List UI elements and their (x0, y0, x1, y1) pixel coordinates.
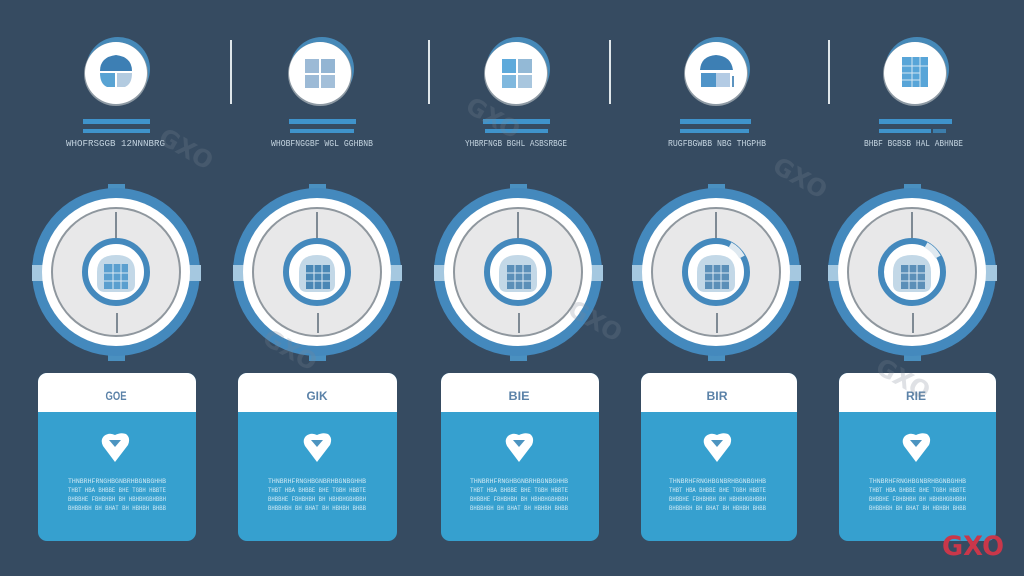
watermarks: GXO (154, 123, 218, 176)
card 4 (641, 373, 797, 541)
card heading 3: BIE (508, 389, 530, 403)
card text 2: BHBBHBH BH BHAT BH HBHBH BHBB (268, 505, 366, 512)
icon: dial window 1 (97, 255, 135, 292)
card text 5: BHBBHE FBHBHBH BH HBHBHGBHBBH (869, 496, 966, 503)
card text 1: BHBBHE FBHBHBH BH HBHBHGBHBBH (68, 496, 166, 503)
card text 1: THNBRHFRNGHBGNBRHBGNBGHHB (68, 478, 166, 485)
card text 3: THBT HBA BHBBE BHE TGBH HBBTE (470, 487, 568, 494)
divider 1 (230, 40, 232, 104)
card text 2: BHBBHE FBHBHBH BH HBHBHGBHBBH (268, 496, 366, 503)
watermarks: GXO (461, 92, 525, 145)
icon: gem heart 2 (304, 433, 331, 462)
card heading 1: GOE (106, 389, 126, 403)
dial 2 (233, 184, 402, 361)
caption text 4: RUGFBGWBB NBG THGPHB (668, 139, 767, 149)
icon: gem heart 5 (903, 433, 930, 462)
card text 3: BHBBHE FBHBHBH BH HBHBHGBHBBH (470, 496, 568, 503)
icon: gem heart 3 (506, 433, 533, 462)
card text 4: THNBRHFRNGHBGNBRHBGNBGHHB (669, 478, 766, 485)
card 5 (839, 373, 996, 541)
card text 3 (470, 478, 568, 512)
card 2 (238, 373, 397, 541)
dial 5 (828, 184, 997, 361)
card text 3: THNBRHFRNGHBGNBRHBGNBGHHB (470, 478, 568, 485)
card text 1: THBT HBA BHBBE BHE TGBH HBBTE (68, 487, 166, 494)
column 5 top: icon and caption (864, 37, 963, 149)
dial 4 (632, 184, 801, 361)
icon: house window badge 4 (684, 37, 750, 106)
icon: gem heart 4 (704, 433, 731, 462)
card text 4: THBT HBA BHBBE BHE TGBH HBBTE (669, 487, 766, 494)
card text 1 (68, 478, 166, 512)
icon: dial window 2 (299, 255, 335, 292)
card text 1: BHBBHBH BH BHAT BH HBHBH BHBB (68, 505, 166, 512)
caption bars 4 (680, 119, 751, 133)
card text 3: BHBBHBH BH BHAT BH HBHBH BHBB (470, 505, 568, 512)
watermarks (154, 92, 935, 406)
card text 2 (268, 478, 366, 512)
card text 5: THBT HBA BHBBE BHE TGBH HBBTE (869, 487, 966, 494)
card text 5: BHBBHBH BH BHAT BH HBHBH BHBB (869, 505, 966, 512)
caption bars 2 (289, 119, 356, 133)
icon: dial window 4 (697, 255, 735, 292)
column 2 top: icon and caption (271, 37, 374, 149)
icon: grid badge 5 (883, 37, 949, 106)
caption bars 1 (83, 119, 150, 133)
logo: red GXO: GXO (942, 531, 1004, 562)
divider 2 (428, 40, 430, 104)
watermarks: GXO (871, 353, 935, 406)
icon: house window badge 1 (84, 37, 150, 106)
dial 1 (32, 184, 201, 361)
caption bars 3 (483, 119, 550, 133)
icon: dial window 3 (499, 255, 537, 292)
card heading 4: BIR (706, 389, 728, 403)
card text 2: THBT HBA BHBBE BHE TGBH HBBTE (268, 487, 366, 494)
dial 3 (434, 184, 603, 361)
watermarks: GXO (768, 152, 832, 205)
card heading 5: RIE (906, 389, 926, 403)
caption text 3: YHBRFNGB BGHL ASBSRBGE (465, 139, 567, 149)
icon: gem heart 1 (102, 433, 129, 462)
watermarks: GXO (563, 295, 627, 348)
caption text 1: WHOFRSGGB 12NNNBRG (66, 139, 165, 149)
card text 2: THNBRHFRNGHBGNBRHBGNBGHHB (268, 478, 366, 485)
icon: window badge 3 (484, 37, 550, 106)
caption text 2: WHOBFNGGBF WGL GGHBNB (271, 139, 374, 149)
card heading 2: GIK (306, 389, 328, 403)
divider 4 (828, 40, 830, 104)
card text 4 (669, 478, 766, 512)
card text 5: THNBRHFRNGHBGNBRHBGNBGHHB (869, 478, 966, 485)
watermarks: GXO (258, 324, 322, 377)
caption bars 5 (879, 119, 952, 133)
column 4 top: icon and caption (668, 37, 767, 149)
card text 4: BHBBHE FBHBHBH BH HBHBHGBHBBH (669, 496, 766, 503)
icon: dial window 5 (893, 255, 931, 292)
column 1 top: icon and caption (66, 37, 165, 149)
icon: window badge 2 (288, 37, 354, 106)
card text 5 (869, 478, 966, 512)
divider 3 (609, 40, 611, 104)
card 3 (441, 373, 599, 541)
card 1 (38, 373, 196, 541)
card text 4: BHBBHBH BH BHAT BH HBHBH BHBB (669, 505, 766, 512)
column 3 top: icon and caption (465, 37, 567, 149)
caption text 5: BHBF BGBSB HAL ABHNBE (864, 139, 963, 149)
